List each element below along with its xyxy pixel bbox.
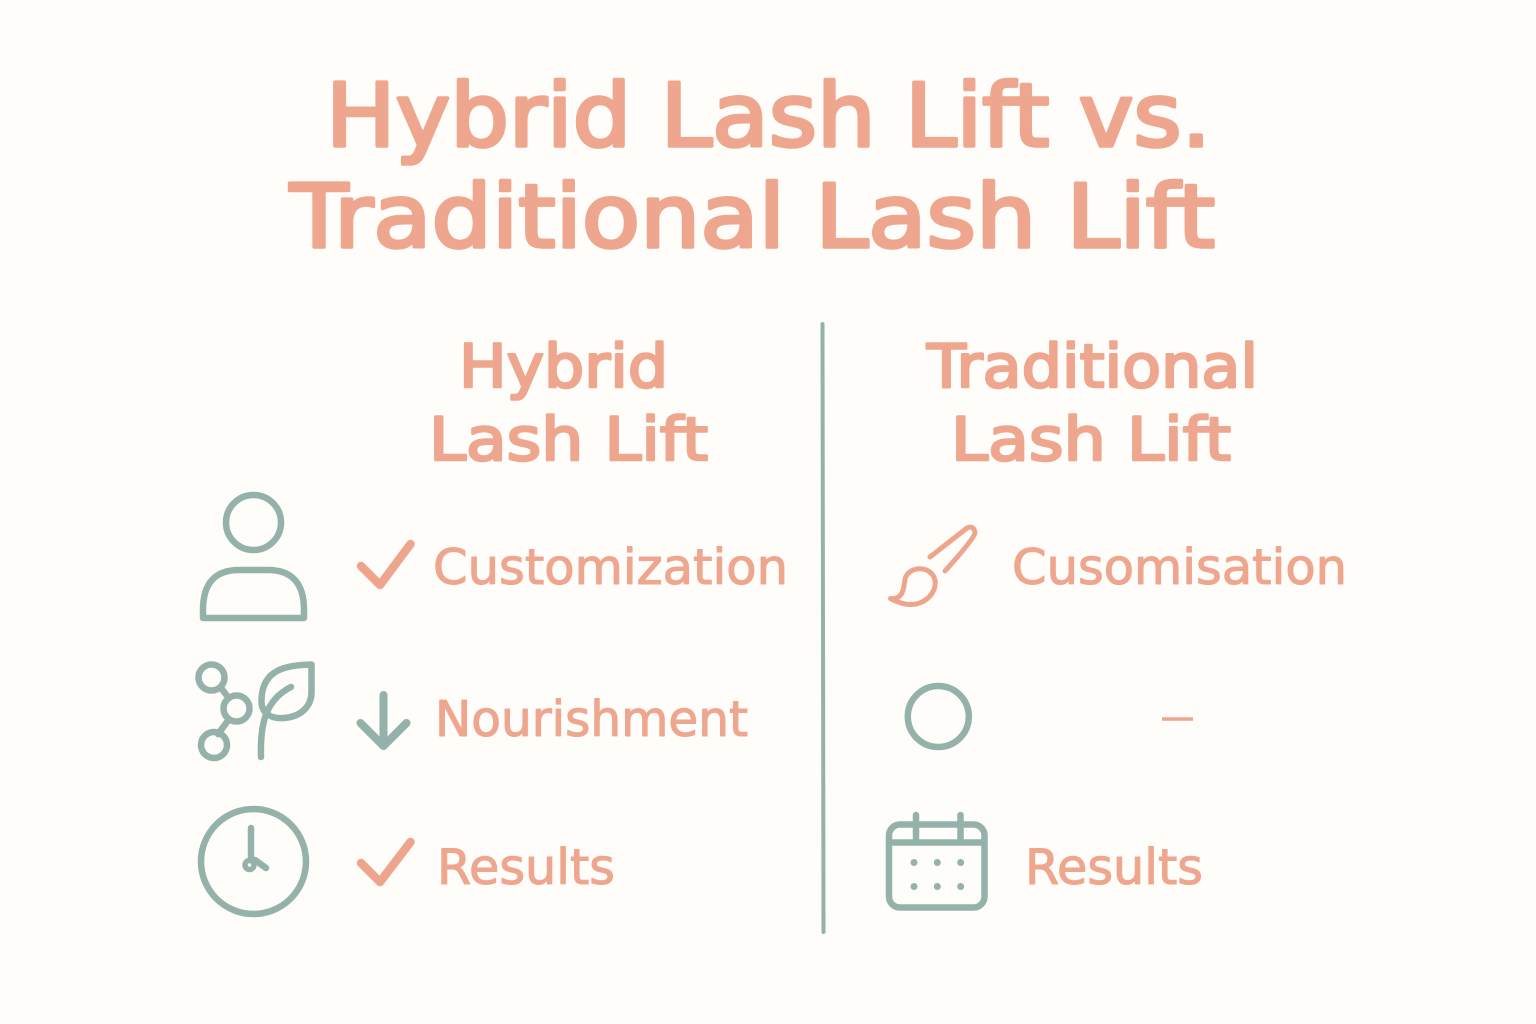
panel: hybrid lash lift bbox=[198, 332, 788, 914]
icon: molecule and leaf bbox=[198, 664, 312, 758]
title bbox=[289, 65, 1215, 268]
icon: brush bbox=[890, 527, 975, 605]
icon: circle bbox=[908, 686, 969, 747]
heading: traditional bbox=[926, 332, 1258, 475]
heading: hybrid: Lash Lift bbox=[429, 405, 708, 475]
label: cusomisation: Cusomisation bbox=[1012, 539, 1347, 596]
heading: traditional: Traditional bbox=[926, 332, 1258, 402]
icon: down arrow bbox=[360, 695, 406, 746]
label: results: Results bbox=[437, 839, 615, 896]
title: Hybrid Lash Lift vs. bbox=[326, 65, 1211, 167]
label: customization: Customization bbox=[433, 539, 788, 596]
icon: calendar bbox=[889, 815, 984, 908]
heading: traditional: Lash Lift bbox=[951, 405, 1231, 475]
icon: check bbox=[361, 544, 410, 585]
label: nourishment: Nourishment bbox=[435, 691, 748, 748]
icon: clock bbox=[201, 809, 306, 914]
heading: hybrid: Hybrid bbox=[459, 332, 668, 402]
panel: traditional lash lift bbox=[889, 332, 1347, 908]
label: results: Results bbox=[1025, 839, 1203, 896]
label: dash bbox=[1162, 717, 1193, 721]
title: Traditional Lash Lift bbox=[289, 166, 1215, 268]
icon: check bbox=[361, 842, 410, 882]
center divider bbox=[822, 324, 824, 932]
icon: person bbox=[203, 495, 304, 618]
heading: hybrid bbox=[429, 332, 708, 475]
